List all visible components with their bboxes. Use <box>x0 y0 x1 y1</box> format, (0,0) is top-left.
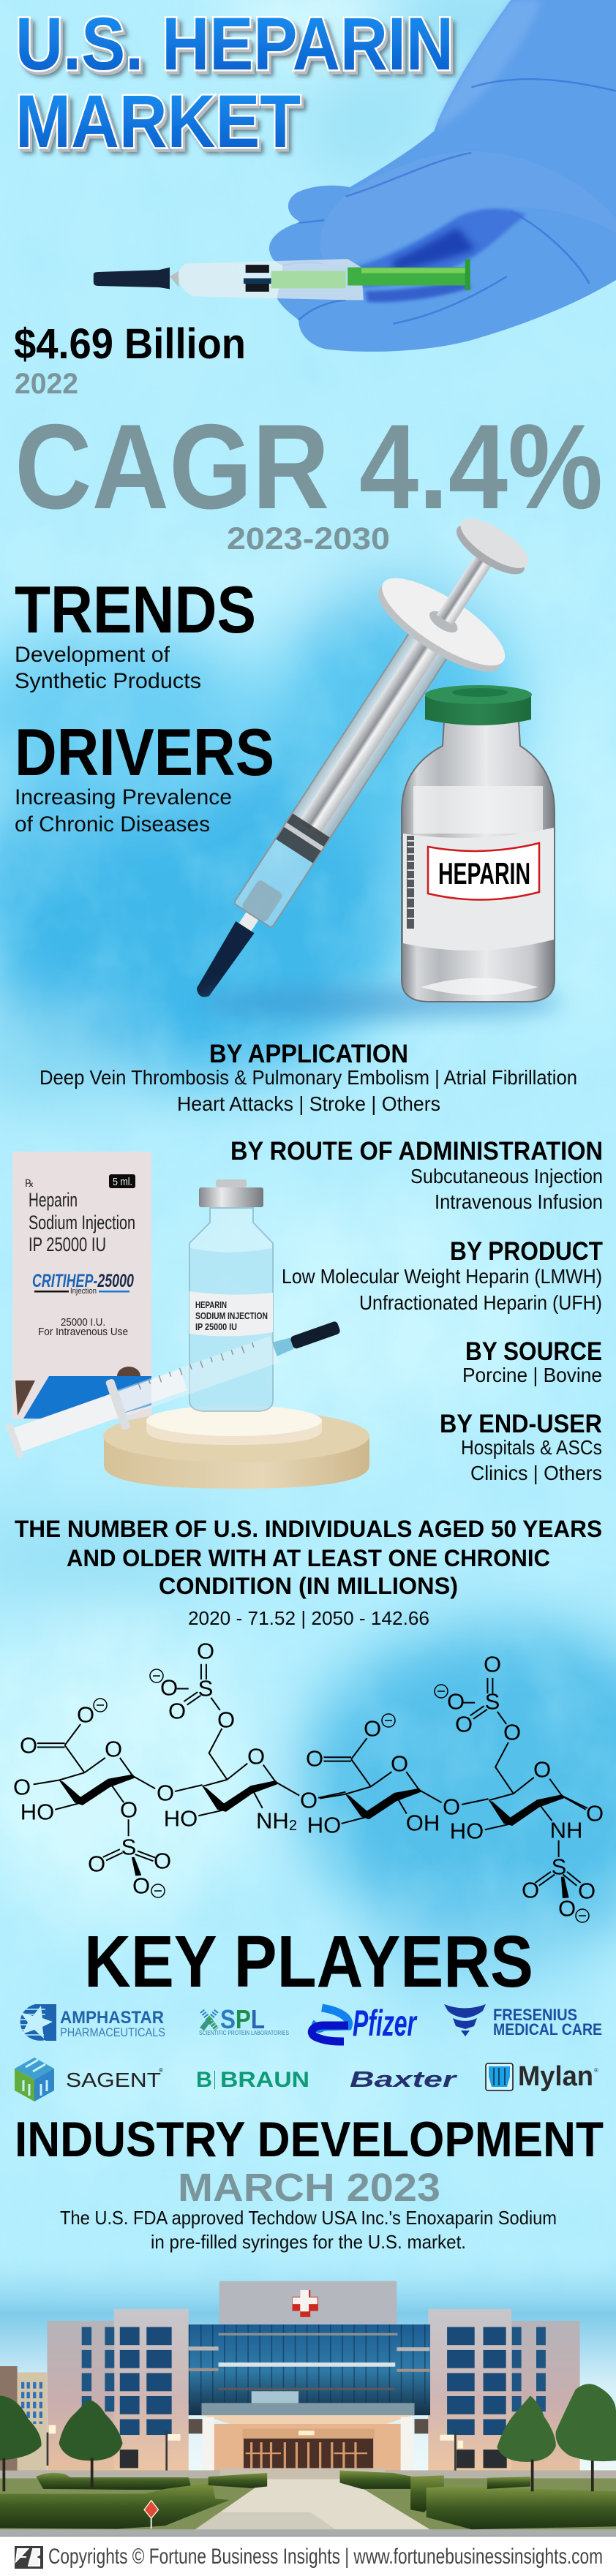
logo: Mylan: ® <box>594 2067 598 2074</box>
trends: Synthetic Products <box>15 669 201 693</box>
image: medicine box: CRITIHEP-25000 <box>32 1271 134 1291</box>
background building <box>0 2366 47 2471</box>
image: medicine box: 5 ml. <box>113 1176 132 1188</box>
trends: Development of <box>15 643 170 667</box>
molecule atom labels: OH <box>406 1810 440 1835</box>
molecule atom labels: O <box>88 1851 105 1876</box>
molecule atom labels: O <box>217 1707 235 1733</box>
industry development date: MARCH 2023 <box>178 2166 440 2210</box>
molecule atom labels: O <box>197 1638 214 1664</box>
logo: Mylan: Mylan <box>518 2061 593 2092</box>
image: medicine box: Sodium Injection <box>29 1212 135 1234</box>
by route of administration <box>230 1137 603 1213</box>
molecule atom labels: O <box>533 1756 551 1783</box>
chronic condition heading: THE NUMBER OF U.S. INDIVIDUALS AGED 50 YEARS <box>15 1516 602 1542</box>
molecule atom labels: O <box>120 1797 138 1822</box>
CAGR figure: 2023-2030 <box>227 521 390 556</box>
molecule atom labels: O <box>503 1720 521 1745</box>
heparin molecule diagram <box>13 1638 604 1922</box>
molecule atom labels: S <box>198 1676 213 1701</box>
molecule atom labels: O <box>484 1651 501 1677</box>
by source: BY SOURCE <box>465 1337 602 1366</box>
molecule atom labels: O <box>522 1878 539 1903</box>
road sign <box>144 2501 158 2528</box>
market size: $4.69 Billion 2022: $4.69 Billion <box>14 320 246 368</box>
lamps <box>48 2425 463 2478</box>
molecule atom labels: O <box>168 1698 186 1724</box>
drivers: Increasing Prevalence <box>15 785 232 809</box>
molecule atom labels: 2 <box>289 1818 297 1834</box>
glass atrium <box>189 2324 430 2415</box>
molecule atom labels: S <box>552 1854 566 1879</box>
molecule atom labels: O <box>77 1702 94 1727</box>
logo: Amphastar: PHARMACEUTICALS <box>60 2025 165 2039</box>
molecule atom labels: O <box>105 1736 122 1762</box>
molecule atom labels: O <box>132 1873 150 1898</box>
trends: TRENDS <box>15 573 256 647</box>
molecule atom labels <box>13 1638 604 1922</box>
by product: BY PRODUCT <box>450 1237 603 1266</box>
molecule atom labels: S <box>485 1689 500 1714</box>
logo: B. Braun <box>196 2068 309 2092</box>
molecule atom labels: O <box>13 1774 31 1800</box>
image: medicine box <box>12 1152 151 1419</box>
vial label <box>403 828 554 951</box>
trees <box>0 2384 616 2491</box>
image: hospital building <box>0 2252 616 2537</box>
molecule bonds <box>34 1664 587 1898</box>
logo: Fresenius Medical Care: MEDICAL CARE <box>493 2020 602 2039</box>
logo: SPL <box>199 2004 289 2036</box>
logo: Amphastar <box>15 2004 165 2041</box>
hedges <box>0 2471 616 2529</box>
image: medicine box: 25000 I.U. <box>61 1316 105 1329</box>
image: medicine box: IP 25000 IU <box>29 1234 106 1255</box>
chronic condition heading: CONDITION (IN MILLIONS) <box>159 1573 458 1599</box>
molecule atom labels: O <box>578 1878 596 1904</box>
molecule atom labels: O <box>300 1787 318 1813</box>
by source <box>462 1337 602 1386</box>
image: large syringe <box>140 492 563 1035</box>
molecule atom labels: O <box>443 1794 460 1819</box>
image: gloved hand holding syringe <box>94 0 616 352</box>
molecule atom labels: O <box>586 1800 604 1827</box>
industry development description: The U.S. FDA approved Techdow USA Inc.'s Enoxaparin Sodium <box>60 2207 557 2229</box>
chronic condition heading <box>15 1516 602 1599</box>
industry development description: in pre-filled syringes for the U.S. market. <box>151 2231 466 2253</box>
logo: Fresenius Medical Care <box>444 2004 602 2039</box>
logo: Sagent: SAGENT <box>66 2069 161 2091</box>
by source: Porcine | Bovine <box>462 1364 602 1386</box>
logo: Pfizer: Pfizer <box>353 2003 418 2044</box>
entrance canopy <box>201 2403 415 2473</box>
molecule atom labels: O <box>20 1733 37 1758</box>
molecule atom labels: NH <box>550 1818 582 1843</box>
logo: Mylan <box>486 2061 598 2092</box>
image: pedestal <box>103 1405 369 1489</box>
top sign block <box>219 2281 397 2324</box>
molecule atom labels: HO <box>20 1799 54 1825</box>
molecule atom labels: O <box>160 1674 178 1701</box>
drivers: of Chronic Diseases <box>15 812 210 836</box>
by application <box>40 1040 577 1115</box>
by route of administration: Intravenous Infusion <box>435 1190 603 1213</box>
vial label <box>189 1291 273 1337</box>
molecule atom labels: HO <box>450 1818 484 1844</box>
molecule atom labels: S <box>121 1834 136 1860</box>
image: small vial <box>189 1179 273 1411</box>
image: medicine box: For Intravenous Use <box>38 1326 128 1338</box>
chronic condition figures: 2020 - 71.52 | 2050 - 142.66 <box>188 1607 429 1629</box>
molecule atom labels: O <box>558 1895 576 1922</box>
by end-user: Clinics | Others <box>470 1462 602 1484</box>
image: heparin vial <box>198 685 563 1019</box>
trends <box>15 573 256 693</box>
by application: Heart Attacks | Stroke | Others <box>177 1092 440 1115</box>
image: medicine box: ℞ <box>25 1177 34 1189</box>
ground, lawn and driveway <box>0 2468 616 2537</box>
image: medicine box: Heparin <box>29 1189 78 1211</box>
vial label: HEPARIN <box>438 856 530 891</box>
logo: B. Braun: B <box>196 2068 212 2092</box>
title: U.S. HEPARIN <box>15 2 454 86</box>
logo: Pfizer <box>312 2003 418 2044</box>
logo: SPL: SPL <box>220 2004 265 2034</box>
title <box>15 2 454 163</box>
logo: B. Braun: BRAUN <box>220 2068 309 2092</box>
vial label: SODIUM INJECTION <box>195 1310 268 1321</box>
logo: Sagent <box>15 2058 163 2101</box>
molecule atom labels: O <box>364 1715 381 1742</box>
market size: $4.69 Billion 2022 <box>14 320 246 400</box>
drivers: DRIVERS <box>15 716 274 790</box>
molecule atom labels: HO <box>307 1812 341 1838</box>
vial green cap <box>425 685 532 725</box>
by application: Deep Vein Thrombosis & Pulmonary Embolism | Atrial Fibrillation <box>40 1066 577 1089</box>
footer <box>0 2537 616 2576</box>
building windows <box>82 2327 546 2468</box>
by product <box>282 1237 603 1314</box>
by end-user <box>440 1410 602 1484</box>
Fortune Business Insights logo <box>15 2546 43 2569</box>
molecule negative charges <box>94 1669 589 1922</box>
image: medicine box: Injection <box>70 1287 97 1296</box>
molecule atom labels: O <box>455 1711 473 1737</box>
molecule atom labels: O <box>391 1750 408 1777</box>
red cross sign <box>293 2290 318 2317</box>
molecule atom labels: NH <box>256 1808 289 1834</box>
logo: SPL: SCIENTIFIC PROTEIN LABORATORIES <box>199 2030 289 2036</box>
market size: $4.69 Billion 2022: 2022 <box>15 368 78 400</box>
drivers <box>15 716 274 836</box>
syringe in hand <box>94 259 470 300</box>
molecule atom labels: O <box>154 1848 171 1873</box>
molecule atom labels: O <box>247 1743 265 1769</box>
logo: Amphastar: AMPHASTAR <box>60 2008 164 2028</box>
molecule atom labels: O <box>306 1746 323 1771</box>
by end-user: BY END-USER <box>440 1410 602 1438</box>
chronic condition heading: AND OLDER WITH AT LEAST ONE CHRONIC <box>67 1545 550 1571</box>
molecule atom labels: HO <box>164 1806 198 1831</box>
vial label: IP 25000 IU <box>195 1321 237 1332</box>
logo: Fresenius Medical Care: FRESENIUS <box>493 2006 577 2024</box>
title: MARKET <box>15 80 301 163</box>
molecule atom labels: O <box>157 1780 174 1806</box>
key players heading: KEY PLAYERS <box>84 1921 533 2003</box>
image: small syringe <box>3 1302 348 1467</box>
logo: Baxter: Baxter <box>350 2066 458 2092</box>
logo: Sagent: ® <box>159 2067 163 2074</box>
vial label: HEPARIN <box>195 1299 227 1310</box>
molecule atom labels: O <box>447 1689 465 1714</box>
industry development description <box>60 2207 557 2253</box>
by application: BY APPLICATION <box>209 1040 408 1068</box>
